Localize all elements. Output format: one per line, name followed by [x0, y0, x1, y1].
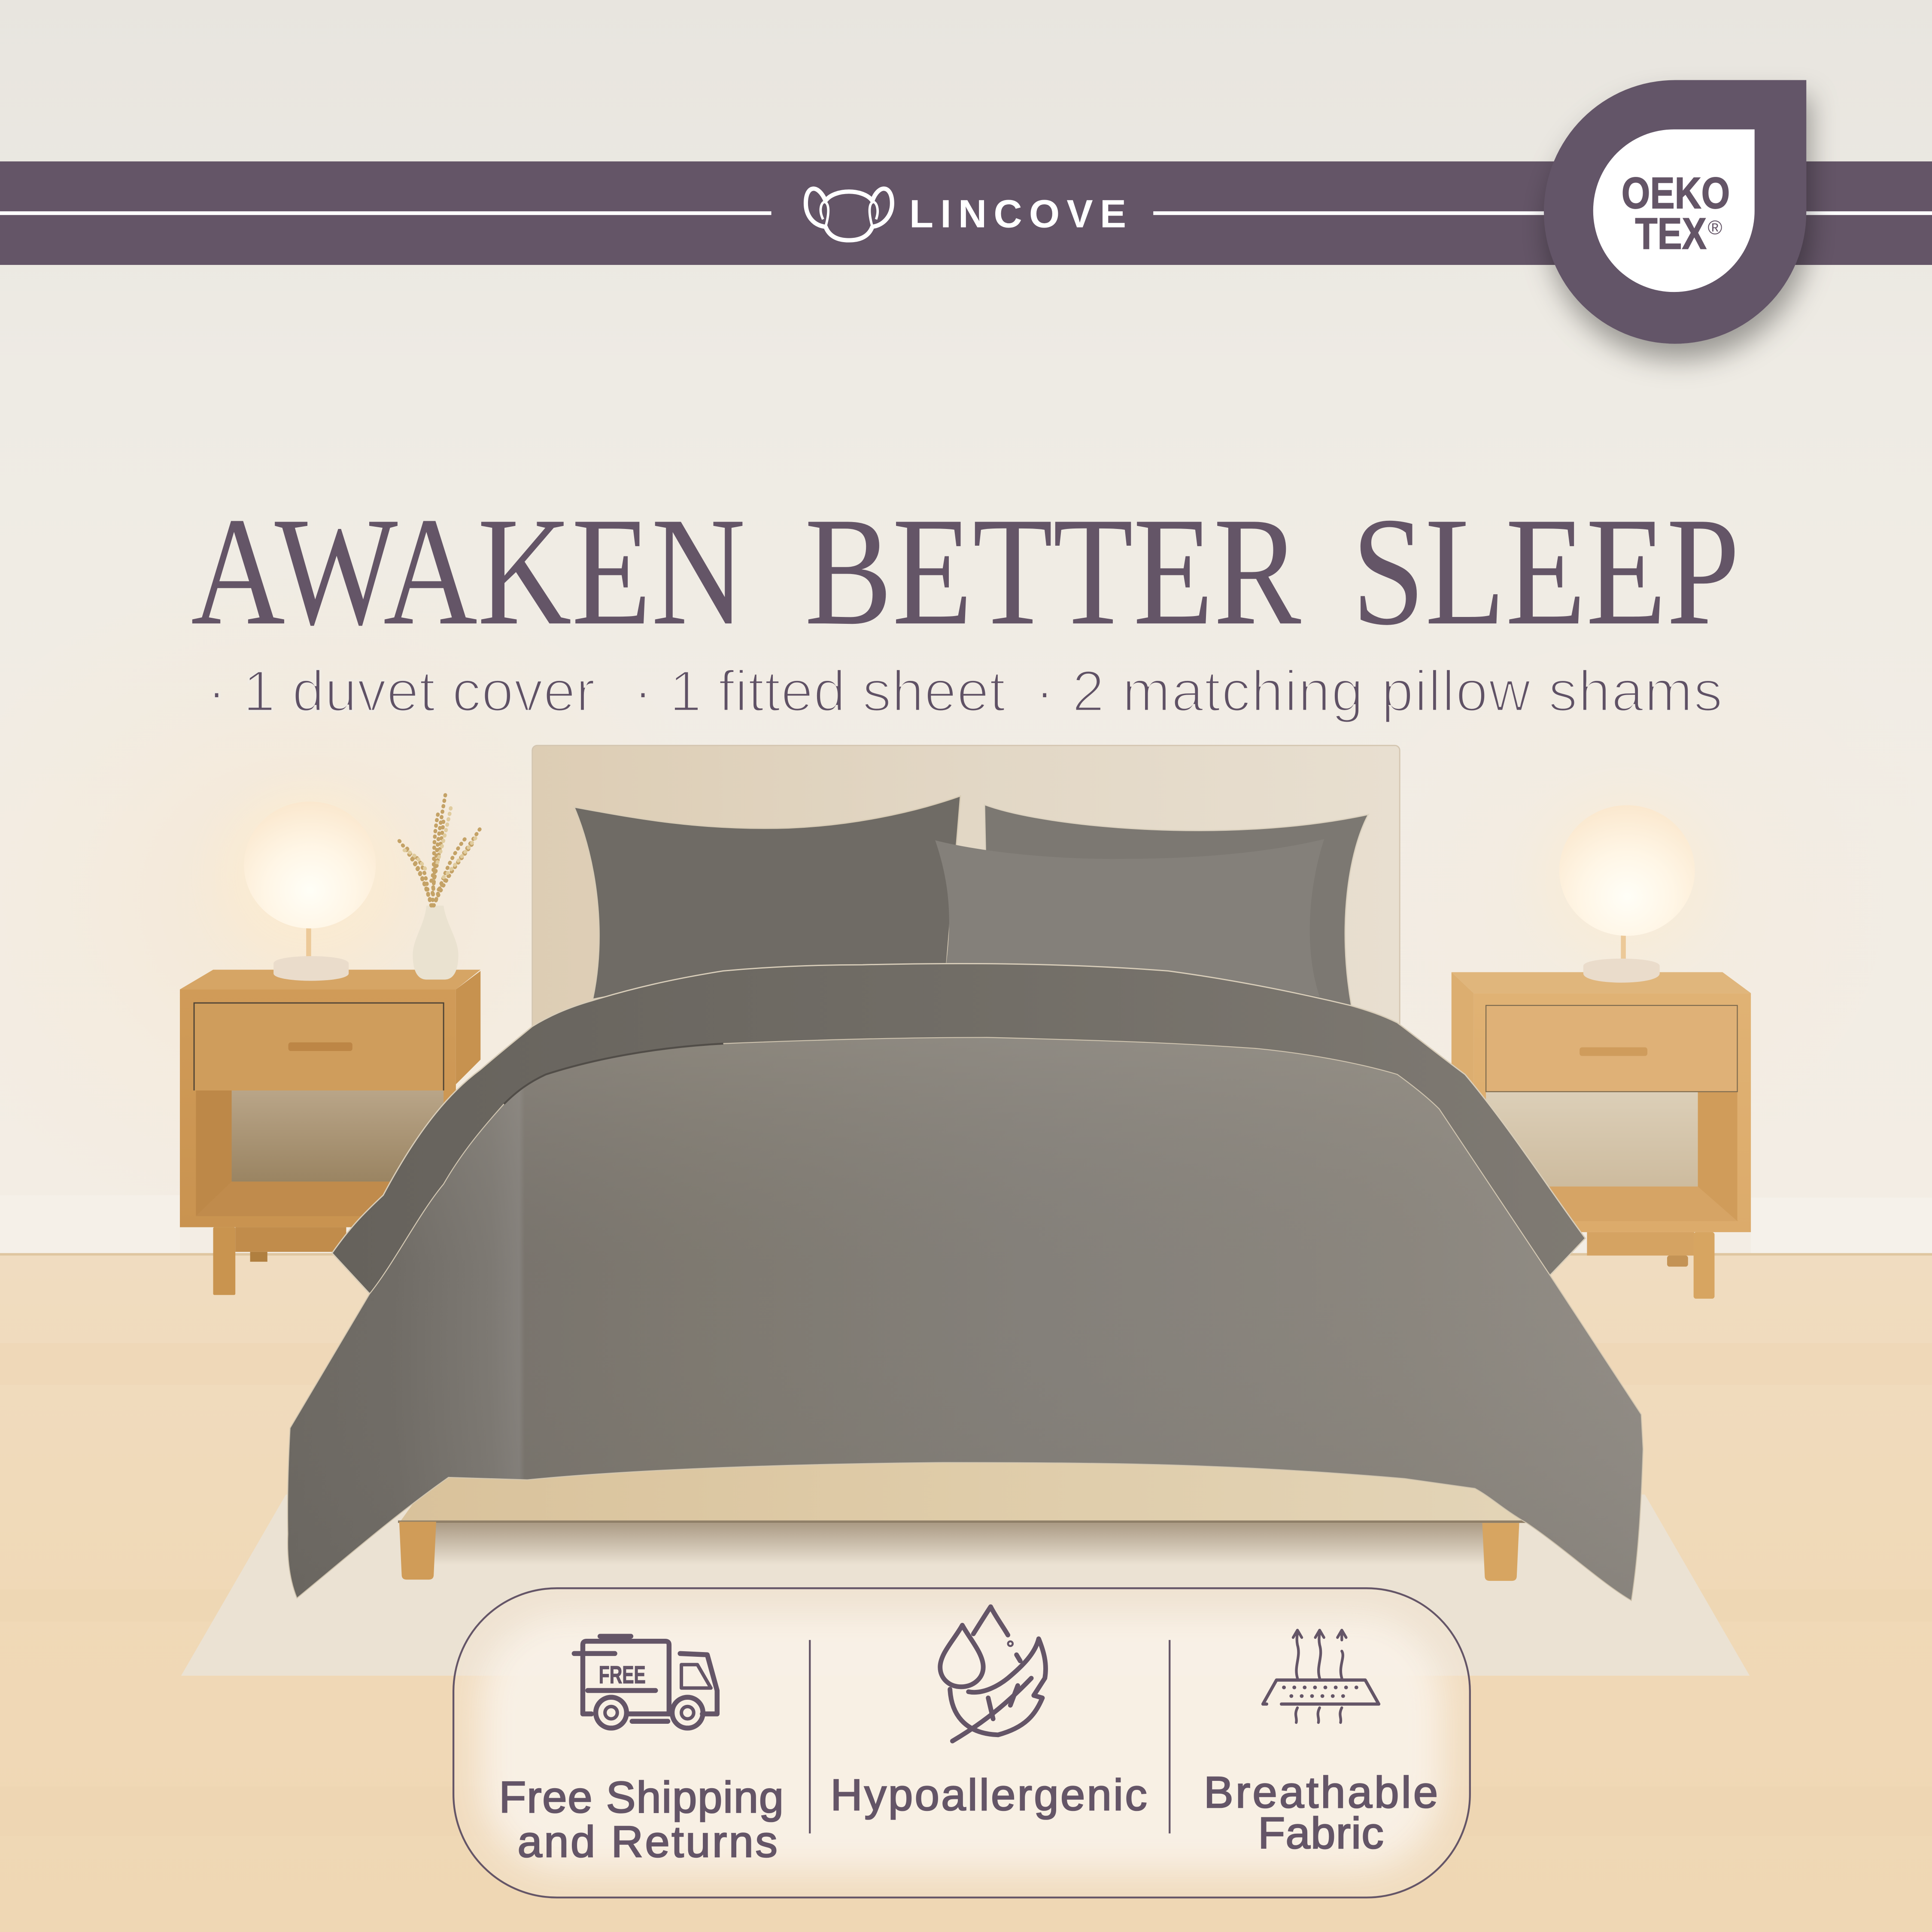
feature text: Hypoallergenic	[830, 1770, 1147, 1820]
lamp glow	[1538, 793, 1715, 961]
badge inner leaf	[1593, 129, 1755, 292]
badge text: OEKO	[1622, 168, 1730, 218]
lamp right	[1559, 805, 1695, 983]
feature: free shipping	[499, 1636, 784, 1866]
divider left	[809, 1640, 811, 1833]
rug	[181, 1495, 1750, 1676]
brand name: LINCOVE	[909, 192, 1126, 236]
certification badge: OEKO-TEX	[1544, 80, 1806, 344]
nightstand right	[1452, 972, 1751, 1299]
feature text	[499, 1772, 784, 1866]
right nightstand with lamp	[1452, 793, 1751, 1299]
feature text: Breathable	[1204, 1767, 1438, 1817]
title: SLEEP	[1352, 486, 1740, 657]
feature text: and Returns	[517, 1817, 778, 1866]
truck label: free: FREE	[599, 1661, 646, 1689]
feature text	[1204, 1767, 1438, 1858]
bed	[288, 745, 1643, 1601]
feature text: Free Shipping	[499, 1772, 784, 1822]
subtitle: set contents	[207, 659, 1722, 723]
top brand band	[0, 161, 1932, 265]
left nightstand with lamp and vase	[180, 786, 480, 1295]
wood floor	[0, 1253, 1932, 1932]
badge text: ®	[1708, 216, 1722, 238]
duvet edge shadow	[504, 1044, 723, 1104]
vase with dried sprigs	[397, 791, 480, 980]
pillow left	[574, 796, 960, 999]
lamp left	[244, 802, 376, 981]
badge text: TEX	[1635, 209, 1707, 258]
subtitle: set contents: · 1 fitted sheet	[633, 659, 1005, 723]
panel outline	[453, 1588, 1470, 1898]
pillow front right	[935, 839, 1324, 997]
title: AWAKEN	[191, 486, 745, 657]
subtitle: set contents: · 2 matching pillow shams	[1035, 659, 1722, 723]
icon: bear head	[806, 188, 892, 240]
lamp glow	[218, 786, 403, 963]
badge outer leaf	[1544, 80, 1806, 344]
wall background	[0, 0, 1932, 1257]
duvet fold	[332, 963, 1585, 1294]
feature: breathable fabric	[1204, 1630, 1438, 1858]
panel frosted background	[453, 1588, 1470, 1898]
divider right	[1169, 1640, 1170, 1833]
duvet main body	[288, 1037, 1643, 1601]
feature text: Fabric	[1258, 1808, 1384, 1858]
brand logo: Lincove	[806, 188, 1126, 240]
nightstand left	[180, 970, 480, 1295]
icon: breathable mat	[1263, 1630, 1379, 1722]
duvet lighting overlay	[288, 1037, 1643, 1601]
title: BETTER	[805, 486, 1302, 657]
icon: drop and feather	[940, 1607, 1046, 1741]
title	[191, 486, 1740, 657]
feature: hypoallergenic	[830, 1607, 1147, 1820]
subtitle: set contents: · 1 duvet cover	[207, 659, 595, 723]
pillow back right	[984, 805, 1368, 1007]
bed frame base	[398, 1454, 1528, 1581]
icon: delivery truck	[574, 1636, 717, 1728]
badge text	[1622, 168, 1730, 258]
feature panel	[453, 1588, 1470, 1898]
headboard	[532, 745, 1400, 1041]
